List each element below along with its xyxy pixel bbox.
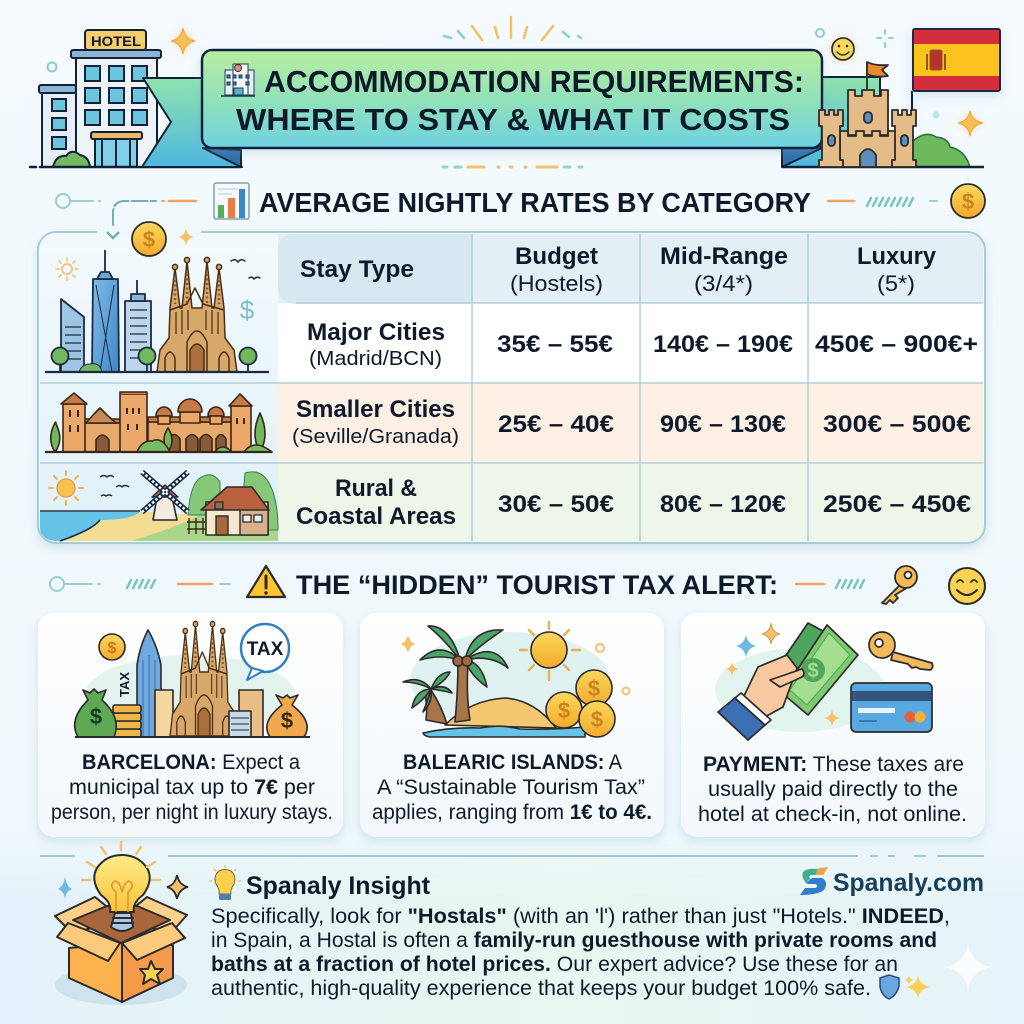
card: payment: [681, 613, 985, 837]
card text: BALEARIC ISLANDS: A: [403, 751, 622, 774]
row: major cities: [307, 319, 978, 370]
row: major cities: (Madrid/BCN): [309, 348, 442, 370]
header: luxury: [857, 243, 937, 296]
illustration labels: [90, 639, 293, 733]
row: smaller cities: 25€ – 40€: [498, 411, 614, 438]
header: stay type: Stay Type: [300, 256, 414, 283]
illustration labels: $: [108, 640, 117, 657]
row: smaller cities: Smaller Cities: [296, 396, 455, 423]
illustration labels: $: [281, 708, 293, 733]
heading text: AVERAGE NIGHTLY RATES BY CATEGORY: [259, 187, 811, 218]
icon: coin above table: $: [143, 227, 155, 252]
banner ribbon: right tail: [782, 77, 880, 167]
coin dollar signs: $: [591, 707, 603, 732]
decorative dashes below banner: [443, 166, 582, 168]
card text: applies, ranging from 1€ to 4€.: [372, 801, 652, 824]
decorative connector left of heading: [56, 194, 196, 225]
coin dollar signs: [558, 676, 603, 732]
illustration: light bulb in open box: [55, 855, 187, 1005]
row: rural background: [278, 463, 983, 541]
row: rural and coastal: 250€ – 450€: [823, 491, 971, 518]
title banner: [202, 50, 822, 148]
row: smaller cities: 90€ – 130€: [660, 411, 786, 438]
decorative: birds, sun, dollar in skyline: [56, 258, 260, 325]
icon: shield: [880, 975, 899, 999]
icon: warning triangle: [247, 566, 285, 597]
title line 2: WHERE TO STAY & WHAT IT COSTS: [236, 102, 790, 137]
card text: [372, 751, 652, 824]
row: smaller cities: (Seville/Granada): [292, 426, 459, 448]
header row background: [278, 234, 983, 303]
icon: orange sparkle left: [171, 28, 195, 54]
insight paragraph: Specifically, look for "Hostals" (with an 'l') rather than just "Hotels." INDEED,: [211, 905, 950, 928]
card text: municipal tax up to 7€ per: [69, 776, 315, 799]
row: major cities: 35€ – 55€: [497, 331, 613, 358]
illustration: major city skyline: [45, 250, 269, 372]
decorative connector left of tax heading: [50, 577, 230, 591]
insight band background: [0, 883, 644, 954]
row: major cities background: [278, 304, 983, 383]
icon: orange sparkle right: [958, 111, 983, 136]
coin dollar signs: $: [558, 698, 570, 723]
header: mid-range: [660, 243, 788, 296]
icon: bush right of castle: [912, 134, 970, 167]
coin dollar signs: $: [588, 676, 600, 701]
banner ribbon: left tail: [142, 78, 242, 167]
card text: PAYMENT: These taxes are: [703, 753, 964, 776]
decorative sparkles: [726, 623, 840, 726]
card text: [51, 751, 333, 824]
decorative connector right of tax heading: [796, 580, 864, 588]
decorative rays above banner: [444, 17, 581, 40]
illustration: castle: [819, 62, 916, 167]
decorative: birds, sun, dollar in skyline: $: [240, 295, 255, 325]
icon: small hotel in title: [221, 64, 255, 96]
header: luxury: (5*): [877, 271, 915, 296]
left scene column background: [40, 234, 278, 541]
card text: BARCELONA: Expect a: [82, 751, 300, 774]
illustration: hand paying with cash, key and card: [715, 623, 933, 740]
card text: hotel at check-in, not online.: [698, 803, 967, 826]
icon: smiley: [949, 568, 985, 604]
row: rural and coastal: Rural &: [335, 475, 417, 502]
header: luxury: Luxury: [857, 243, 937, 270]
icon: coin right of heading: [951, 184, 985, 218]
row: rural and coastal: Coastal Areas: [296, 503, 456, 530]
logo: Spanaly.com: Spanaly.com: [833, 869, 984, 897]
illustration labels: TAX: [117, 672, 132, 697]
row: rural and coastal: 80€ – 120€: [660, 491, 786, 518]
icon: coin right of heading: $: [962, 189, 974, 214]
insight paragraph: in Spain, a Hostal is often a family-run guesthouse with private rooms and: [211, 929, 937, 952]
decorative: small ring: [48, 62, 56, 72]
decorative ring and cross near smiley: [816, 29, 893, 47]
insight paragraph: baths at a fraction of hotel prices. Our expert advice? Use these for an: [211, 953, 898, 976]
icon: coin above table: [107, 222, 194, 256]
decorative divider: [40, 855, 984, 857]
table grid lines: [40, 234, 983, 541]
illustration: hotel building: HOTEL: [91, 34, 141, 49]
illustration: Barcelona tax scene: [75, 621, 310, 737]
card: Barcelona tax: [38, 613, 343, 837]
header: budget: (Hostels): [510, 271, 603, 296]
section heading: average nightly rates: [214, 183, 811, 219]
decorative: ground line right: [782, 166, 984, 168]
header: mid-range: Mid-Range: [660, 243, 788, 270]
row: smaller cities: [292, 396, 971, 448]
decorative rays and sparkles around bulb: [58, 842, 188, 899]
title line 1: ACCOMMODATION REQUIREMENTS:: [264, 64, 804, 99]
card text: person, per night in luxury stays.: [51, 801, 333, 824]
icon: Spanish flag: [912, 29, 1000, 112]
insight paragraph: authentic, high-quality experience that keeps your budget 100% safe.: [211, 977, 871, 1000]
row: smaller cities background: [278, 383, 983, 463]
card text: A “Sustainable Tourism Tax”: [377, 776, 645, 799]
decorative: pale dot: [932, 112, 940, 118]
row: rural and coastal: [296, 475, 971, 530]
icon: sparkles: [905, 976, 930, 998]
illustration labels: TAX: [247, 639, 284, 660]
decorative faint star: [944, 943, 992, 991]
icon: bar chart: [214, 183, 249, 219]
stay type header cell: [278, 234, 472, 304]
cash symbol: $: [807, 660, 819, 682]
decorative sparkles: [402, 637, 630, 694]
icon: S mark: [800, 867, 828, 895]
rates table panel: [38, 232, 985, 543]
illustration: coastal and rural scene: [40, 471, 278, 541]
icon: gold key: [882, 566, 917, 604]
header: mid-range: (3/4*): [694, 271, 753, 296]
section heading: tourist tax alert: [247, 566, 778, 600]
insight heading: [209, 865, 431, 900]
card: Balearic Islands tax: [360, 613, 664, 837]
decorative connector right of heading: [828, 198, 937, 206]
row: rural and coastal: 30€ – 50€: [498, 491, 614, 518]
illustration: Alhambra palace scene: [45, 392, 272, 452]
card text: [698, 753, 967, 826]
header: budget: Budget: [515, 243, 598, 270]
row: major cities: 450€ – 900€+: [815, 331, 978, 358]
illustration: hotel building: [30, 30, 240, 167]
card text: usually paid directly to the: [708, 778, 958, 801]
illustration: island with palms and coins: [403, 622, 615, 737]
insight paragraph: [211, 905, 950, 1000]
row: smaller cities: 300€ – 500€: [823, 411, 971, 438]
heading text: THE “HIDDEN” TOURIST TAX ALERT:: [296, 570, 778, 600]
row: major cities: 140€ – 190€: [653, 331, 793, 358]
icon: smiley top right: [832, 38, 854, 60]
insight heading: Spanaly Insight: [246, 872, 431, 900]
row: major cities: Major Cities: [307, 319, 445, 346]
gap in table border around coin: [97, 226, 201, 238]
icon: small light bulb: [209, 865, 241, 900]
header: budget: [510, 243, 603, 296]
illustration labels: $: [90, 704, 102, 729]
